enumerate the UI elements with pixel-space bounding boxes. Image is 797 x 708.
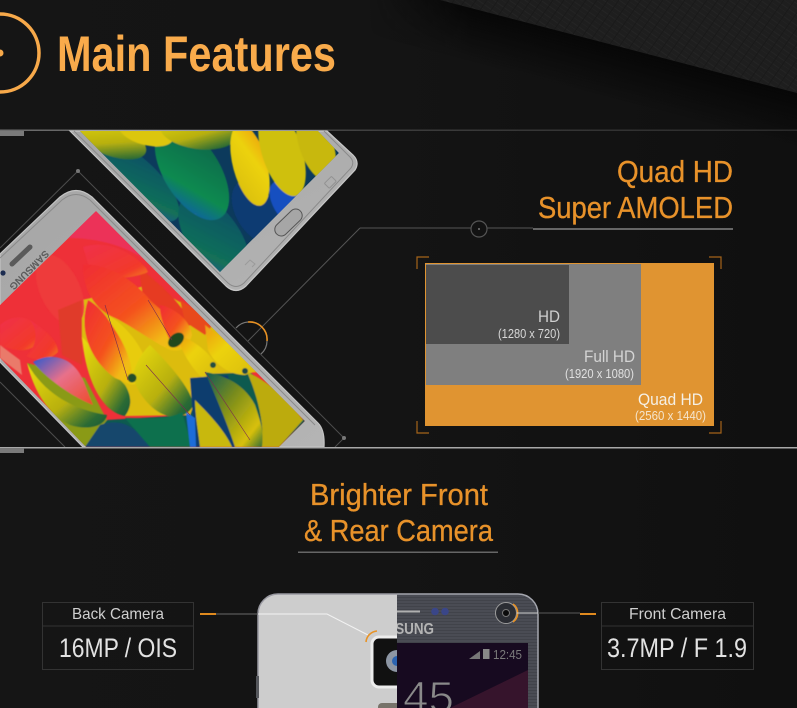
feather midribs — [105, 300, 250, 440]
rear camera module — [370, 636, 397, 688]
label box: back camera: 16MP / OIS — [59, 633, 177, 663]
label box: front camera — [601, 602, 754, 670]
heading: Brighter Front & Rear Camera: & Rear Camera — [304, 513, 494, 548]
front camera lens callout — [496, 602, 596, 624]
front half — [397, 593, 539, 708]
heading: Quad HD Super AMOLED — [538, 154, 733, 225]
heading: Quad HD Super AMOLED: Quad HD — [617, 154, 733, 189]
yellow feathers — [181, 338, 216, 378]
resolution comparison chart — [417, 257, 721, 433]
green yellow feather — [133, 345, 193, 417]
corner brackets — [417, 257, 721, 433]
display — [397, 643, 528, 708]
back key — [245, 260, 255, 267]
olive feather — [82, 337, 130, 416]
back half — [256, 593, 397, 708]
back red feather — [140, 272, 190, 326]
label box: back camera — [42, 602, 194, 670]
rear camera callout — [200, 613, 377, 642]
Quad HD block — [425, 263, 714, 426]
speaker grille — [12, 247, 30, 264]
Full HD block — [426, 264, 641, 385]
blue-pink feather — [33, 357, 93, 405]
flash — [378, 703, 397, 708]
navy feather — [190, 375, 240, 447]
Quad HD block: Quad HD — [638, 390, 703, 409]
callout: display arc and connector — [236, 228, 533, 354]
label box: front camera: Front Camera — [629, 606, 726, 623]
brand text: MSUNG — [384, 621, 434, 638]
heading underline — [533, 228, 733, 230]
speaker — [397, 610, 420, 612]
sensors — [431, 608, 439, 615]
phone: half back, half front — [256, 594, 538, 708]
camera heading underline — [298, 552, 498, 553]
brand text: SAMSUNG — [7, 248, 51, 292]
title: Main Features — [57, 26, 336, 82]
home button — [272, 206, 305, 239]
label box: front camera: 3.7MP / F 1.9 — [607, 633, 747, 663]
phone: upper device with blue-green feather screen — [68, 130, 358, 292]
HD block: (1280 x 720) — [498, 326, 560, 341]
yellow-green feather — [27, 363, 107, 428]
Quad HD block: (2560 x 1440) — [635, 408, 706, 423]
HD block: HD — [538, 307, 560, 326]
textured corner panel — [434, 0, 797, 102]
display section: top rule — [0, 130, 797, 136]
label box: back camera: Back Camera — [72, 606, 164, 623]
Full HD block: (1920 x 1080) — [565, 366, 634, 381]
display section: bottom rule — [0, 447, 797, 453]
Full HD block: Full HD — [584, 347, 635, 366]
teal-yellow feather — [205, 372, 264, 447]
yellow feather — [108, 316, 142, 384]
big red-orange feather — [86, 265, 182, 350]
status bar — [469, 651, 480, 659]
heading: Brighter Front & Rear Camera: Brighter Front — [310, 477, 488, 512]
orange-yellow feather — [160, 305, 192, 348]
recent key — [324, 176, 336, 188]
connector node — [471, 221, 487, 237]
left red feathers — [0, 318, 36, 350]
section icon: circle — [0, 14, 39, 92]
heading: Brighter Front & Rear Camera — [304, 477, 494, 548]
base zones — [85, 372, 305, 447]
feather screen — [80, 131, 339, 272]
red-yellow tall feather — [84, 300, 132, 385]
display: 12:45 — [493, 647, 522, 662]
feather screen — [0, 211, 305, 447]
olive right feather — [247, 372, 303, 447]
callout bracket lines around lower phone — [0, 169, 346, 447]
HD block — [426, 265, 569, 344]
phone: lower device with red-yellow feather screen — [0, 190, 324, 447]
front camera — [0, 270, 6, 276]
heading: Quad HD Super AMOLED: Super AMOLED — [538, 190, 733, 225]
bottom teal feather — [85, 422, 150, 447]
top red feather — [83, 245, 148, 278]
side button — [256, 676, 259, 698]
dark tips — [168, 332, 184, 348]
